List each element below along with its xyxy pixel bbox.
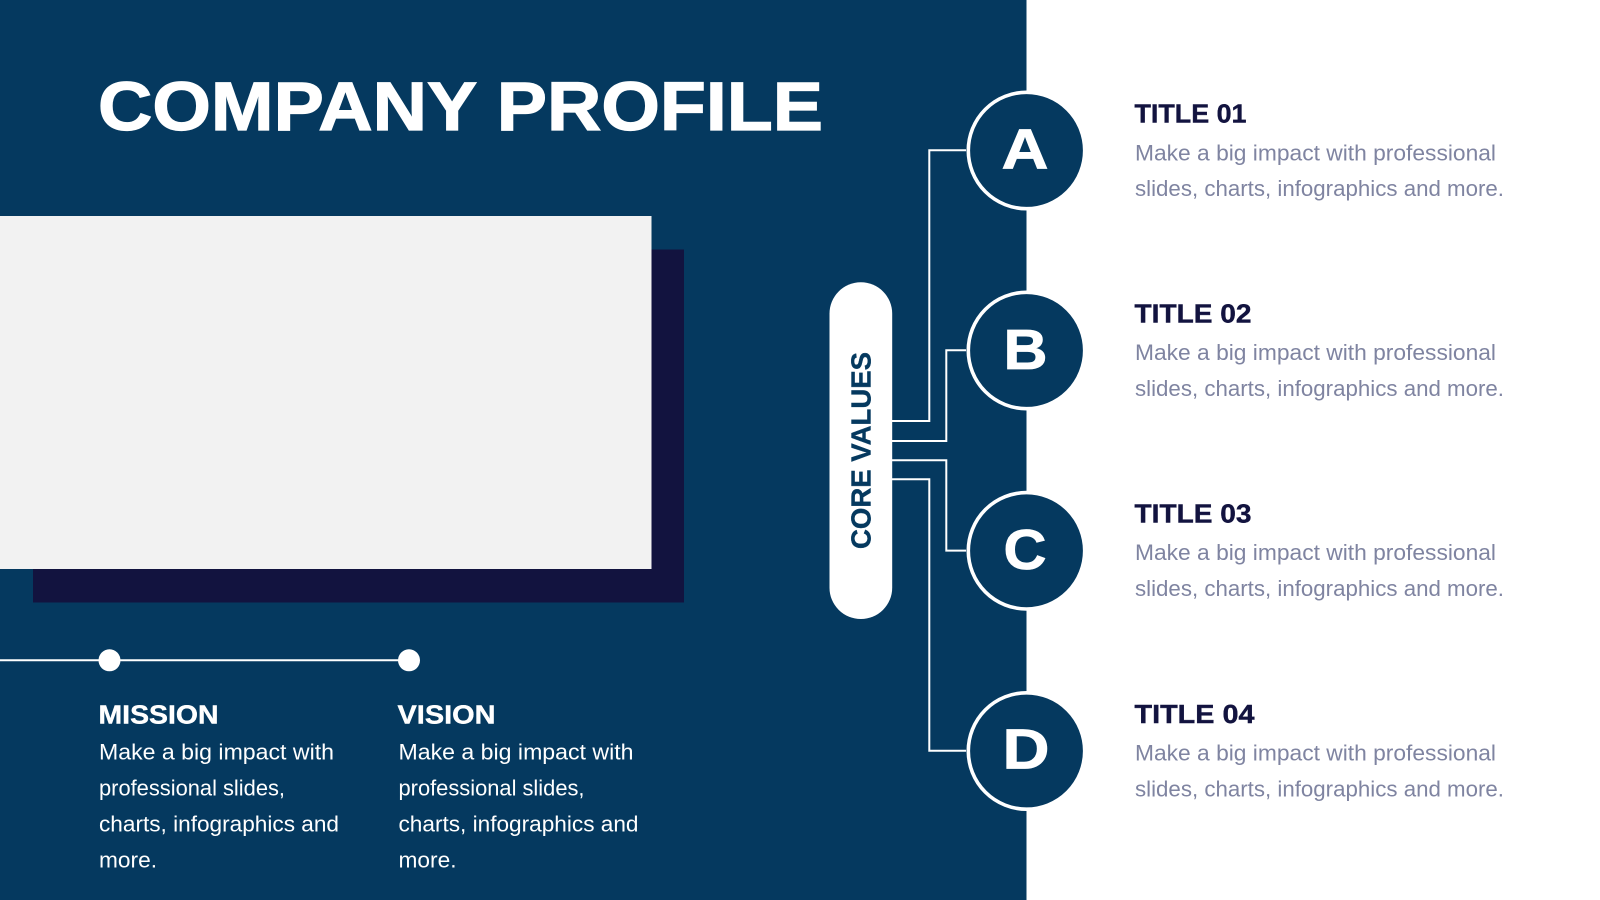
mission body: Make a big impact with [99,739,334,764]
badge B: B [1004,318,1048,382]
text block: vision [398,700,638,872]
title: COMPANY PROFILE [98,68,823,145]
mission body: charts, infographics and [99,812,339,836]
connectors from core values to circles [892,150,966,751]
text block: title 01: slides, charts, infographics and more. [1135,176,1504,201]
vision heading: VISION [398,700,496,730]
vision body: more. [398,847,456,872]
text block: title 02 [1134,298,1504,401]
text block: title 02: Make a big impact with professional [1135,340,1496,365]
vision body: professional slides, [398,776,584,800]
pill label: CORE VALUES [846,352,877,549]
text block: title 01: Make a big impact with professional [1135,140,1496,165]
text block: title 03: slides, charts, infographics and more. [1135,576,1504,601]
core values pill [830,282,892,619]
text block: title 01: TITLE 01 [1134,98,1246,128]
timeline line [0,659,409,661]
text block: title 03 [1134,498,1504,601]
text block: title 03: Make a big impact with professional [1135,540,1496,565]
mission body: more. [99,847,157,872]
pill shape [830,282,892,619]
image placeholder [0,216,652,569]
text block: title 04: TITLE 04 [1134,699,1255,729]
badge D: D [1002,718,1050,782]
badge A: A [1002,118,1048,182]
image shadow [33,250,684,602]
text block: title 04 [1134,699,1504,801]
vision body: Make a big impact with [398,739,634,764]
vision body [398,739,638,872]
text block: title 02: slides, charts, infographics and more. [1135,376,1504,401]
badge D [968,693,1085,809]
text block: title 03: TITLE 03 [1134,498,1252,528]
text block: mission [98,700,339,872]
timeline dot: mission [98,649,120,671]
text block: title 02: TITLE 02 [1134,298,1252,328]
text block: title 04: Make a big impact with professional [1135,740,1496,765]
timeline dot: vision [398,649,420,671]
badge A [968,92,1085,209]
text block: title 01 [1134,98,1504,201]
panel: navy background [0,0,1026,900]
mission body: professional slides, [99,776,285,800]
vision body: charts, infographics and [398,812,638,836]
mission heading: MISSION [98,700,218,730]
badge B [968,292,1085,409]
badge C: C [1004,518,1046,582]
image placeholder with shadow [0,216,684,602]
timeline [0,649,420,671]
text block: title 04: slides, charts, infographics and more. [1135,776,1504,801]
badge C [968,493,1085,609]
mission body [99,739,339,872]
